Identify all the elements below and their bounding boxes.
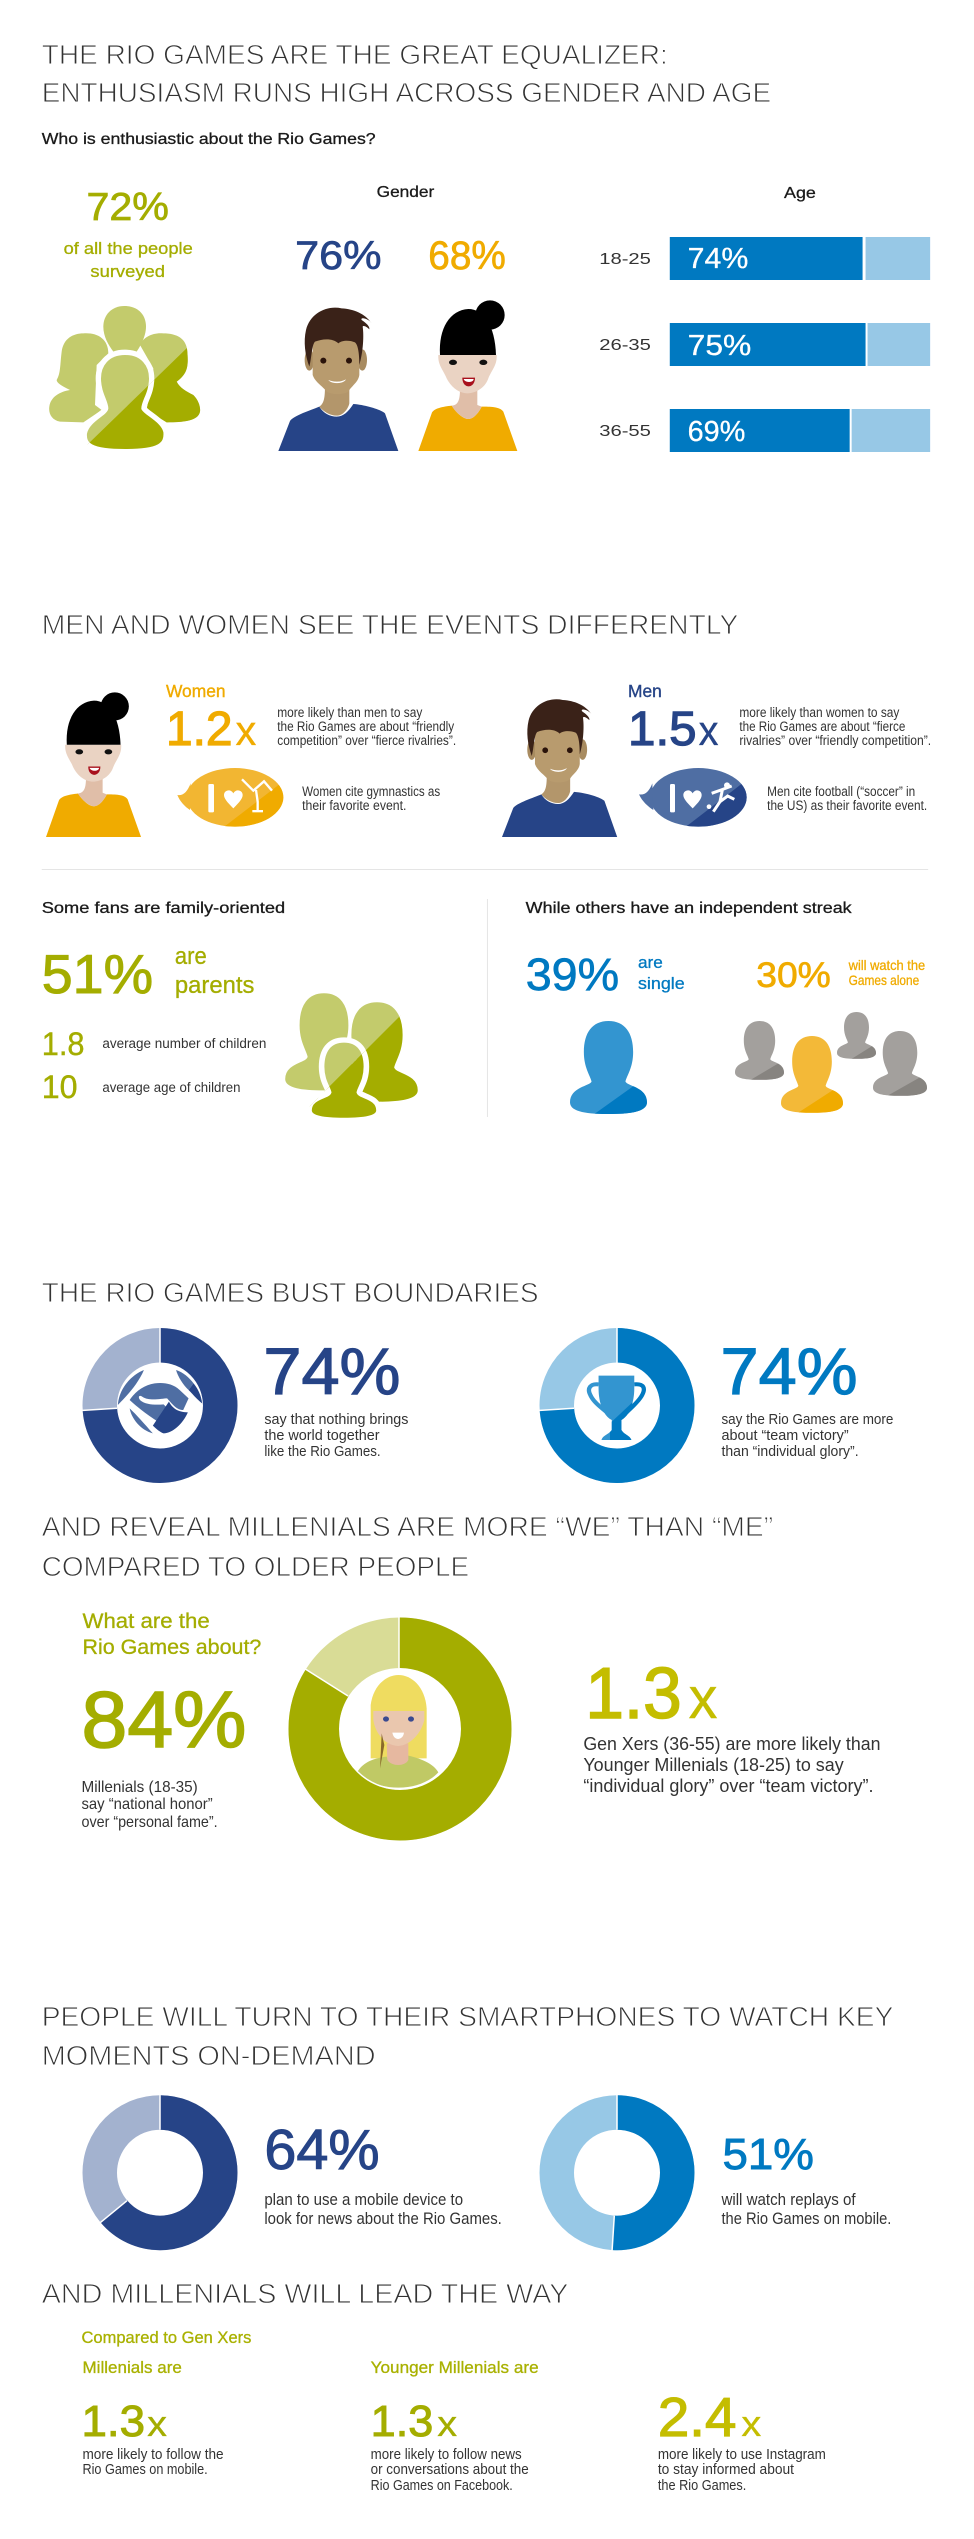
stat: 10 age [42, 1069, 240, 1105]
heading: age: Age [784, 185, 816, 202]
text: follow on mobile [82, 2447, 224, 2478]
text: men more likely: the Rio Games are about “fierce [739, 719, 905, 734]
stat: 10 age: average age of children [102, 1080, 240, 1095]
title: smartphones: MOMENTS ON-DEMAND [42, 2040, 376, 2071]
text: use instagram: more likely to use Instagram [658, 2447, 826, 2463]
stat: 1.3x gen xers: 1.3 [585, 1654, 682, 1734]
stat: 1.8 children: average number of children [102, 1036, 266, 1051]
text: team victory: say the Rio Games are more [721, 1411, 893, 1428]
bar: 26-35: 75% [688, 330, 751, 362]
panel: women [46, 681, 456, 837]
stat: 39 percent: 39% [526, 949, 619, 1000]
panel: gender [278, 184, 517, 451]
text: men cite football: Men cite football (“soccer” in [767, 784, 915, 799]
panel: mobile news [99, 2094, 502, 2233]
text: follow news on facebook: or conversations about the [371, 2462, 529, 2478]
icon: woman [418, 300, 517, 451]
stat: 64 percent: 64% [264, 2119, 380, 2182]
donut chart: 74 percent blue [538, 1327, 677, 1466]
column: millenials [81, 2358, 224, 2478]
icon: man [278, 308, 398, 451]
text: will watch replays: will watch replays of [721, 2191, 856, 2209]
panel: nothing brings the world together [81, 1327, 408, 1466]
stat: 30 percent: 30% [756, 956, 831, 995]
title: men and women: MEN AND WOMEN SEE THE EVENTS DIFFERENTLY [42, 609, 738, 640]
title: great equalizer: ENTHUSIASM RUNS HIGH ACROSS GENDER AND AGE [42, 77, 771, 108]
bar: 36-55: 69% [688, 416, 745, 448]
heading: family oriented: Some fans are family-oriented [42, 900, 285, 917]
caption: of all the people surveyed [64, 239, 193, 281]
caption: of all the people surveyed: of all the people [64, 239, 193, 258]
label: are single: single [638, 974, 685, 993]
text: will watch replays [721, 2191, 891, 2228]
text: women cite gymnastics [302, 784, 440, 813]
stat: 2.4x instagram: 2.4 [658, 2386, 736, 2448]
stat: 10 age: 10 [42, 1069, 78, 1105]
panel: all people surveyed [49, 186, 200, 452]
text: men cite football: the US) as their favorite event. [767, 798, 927, 813]
text: men more likely [739, 705, 931, 748]
label: are parents [175, 943, 254, 999]
stat: 84 percent: 84% [81, 1675, 246, 1764]
stat: 1.2x: x [236, 707, 256, 754]
text: team victory [721, 1411, 893, 1460]
icon: single person [570, 1021, 647, 1114]
column: instagram [658, 2386, 826, 2494]
text: nothing brings world together: say that nothing brings [264, 1411, 408, 1428]
title: we than me: COMPARED TO OLDER PEOPLE [42, 1551, 469, 1582]
icon: speech bubble I love gymnastics [177, 768, 283, 827]
stat: 51 percent: 51% [722, 2130, 814, 2179]
title: great equalizer: THE RIO GAMES ARE THE GREAT EQUALIZER: [42, 39, 668, 70]
text: team victory: about “team victory” [721, 1427, 849, 1444]
stat: 1.3x mobile: 1.3 [81, 2397, 145, 2446]
label: are single: are [638, 953, 663, 972]
text: use instagram: the Rio Games. [658, 2478, 746, 2494]
stat: 51 percent: 51% [42, 943, 153, 1005]
bar: 18-25: 18-25 [599, 251, 651, 268]
text: follow news on facebook: Rio Games on Facebook. [371, 2478, 513, 2494]
title: great equalizer [42, 39, 771, 108]
stat: 1.2x: 1.2 [166, 703, 233, 756]
stat: women 68 percent: 68% [428, 234, 506, 278]
text: millenials say national honor [81, 1779, 218, 1831]
title: we than me [42, 1511, 773, 1582]
text: women more likely: competition” over “fierce rivalries”. [277, 733, 456, 748]
caption: of all the people surveyed: surveyed [90, 262, 165, 281]
panel: family-oriented fans [42, 900, 419, 1120]
icon: handshake [118, 1370, 202, 1433]
text: team victory: than “individual glory”. [721, 1443, 859, 1460]
subheading: compared to gen xers: Compared to Gen Xers [81, 2328, 251, 2347]
text: follow news on facebook: more likely to follow news [371, 2447, 522, 2463]
icon: speech bubble I love football [639, 768, 747, 827]
stat: 1.3x facebook: x [437, 2404, 457, 2444]
text: women cite gymnastics: their favorite event. [302, 798, 406, 813]
stat: 2.4x instagram: x [741, 2404, 761, 2444]
label: millenials are: Millenials are [82, 2358, 182, 2377]
bar: 26-35 [599, 323, 930, 366]
text: women more likely: more likely than men to say [277, 705, 423, 720]
text: men more likely: more likely than women to say [739, 705, 900, 720]
heading: independent streak: While others have an independent streak [526, 900, 852, 917]
panel: age bar chart [599, 185, 930, 452]
label: younger millenials are: Younger Millenials are [371, 2358, 539, 2377]
text: plan to use a mobile device [264, 2191, 502, 2228]
bar: 26-35: 26-35 [599, 337, 651, 354]
question: What are the [82, 1610, 210, 1633]
title: smartphones [42, 2001, 893, 2071]
text: plan to use a mobile device: plan to use a mobile device to [264, 2191, 463, 2209]
icon: trophy [589, 1376, 644, 1440]
donut chart: 84 percent [304, 1616, 486, 1815]
text: use instagram [658, 2447, 826, 2494]
stat: 74 percent: 74% [263, 1334, 400, 1408]
question [82, 1610, 261, 1659]
subheading: who is enthusiastic: Who is enthusiastic about the Rio Games? [42, 131, 376, 148]
text: nothing brings world together: like the Rio Games. [264, 1443, 381, 1460]
title: smartphones: PEOPLE WILL TURN TO THEIR SMARTPHONES TO WATCH KEY [42, 2001, 893, 2032]
text: gen xers more likely: Gen Xers (36-55) are more likely than [583, 1733, 880, 1754]
text: millenials say national honor: over “personal fame”. [81, 1814, 218, 1831]
label: will watch alone [848, 957, 925, 988]
stat: 72 percent: 72% [86, 186, 169, 229]
label: are parents: parents [175, 972, 254, 999]
stat: 1.3x facebook: 1.3 [371, 2397, 433, 2446]
text: will watch replays: the Rio Games on mobile. [721, 2210, 891, 2228]
panel: team victory [538, 1327, 893, 1466]
text: millenials say national honor: say “national honor” [81, 1796, 213, 1813]
label: men: Men [628, 681, 662, 701]
icon: crowd of people [49, 306, 200, 452]
bar: 18-25: 74% [688, 243, 748, 275]
donut chart: 51 percent [557, 2094, 677, 2252]
text: plan to use a mobile device: look for news about the Rio Games. [264, 2210, 502, 2228]
label: are single [638, 953, 685, 993]
stat: 1.3x gen xers: x [689, 1667, 718, 1731]
text: nothing brings world together [264, 1411, 408, 1460]
label: women: Women [166, 681, 226, 701]
text: gen xers more likely [583, 1733, 880, 1796]
text: men cite football [767, 784, 927, 813]
stat: 1.8 children: 1.8 [42, 1026, 84, 1062]
icon: man portrait [502, 699, 617, 837]
label: will watch alone: will watch the [848, 957, 925, 973]
icon: young woman [357, 1675, 438, 1788]
text: women cite gymnastics: Women cite gymnastics as [302, 784, 440, 799]
bar: 36-55: 36-55 [599, 423, 651, 440]
panel: what are the rio games about [81, 1610, 880, 1831]
icon: family [284, 992, 419, 1120]
label: will watch alone: Games alone [849, 972, 919, 988]
text: gen xers more likely: Younger Millenials (18-25) to say [583, 1754, 844, 1775]
column: younger millenials facebook [371, 2358, 539, 2494]
donut chart: 74 percent navy [81, 1327, 220, 1466]
text: millenials say national honor: Millenials (18-35) [81, 1779, 198, 1796]
text: follow on mobile: more likely to follow the [82, 2447, 224, 2463]
text: women more likely [277, 705, 456, 748]
panel: independent fans [526, 900, 927, 1114]
stat: 1.3x mobile: x [147, 2404, 167, 2444]
stat: 1.8 children [42, 1026, 266, 1062]
stat: 1.5x: 1.5 [628, 703, 697, 756]
donut chart: 64 percent [99, 2094, 220, 2233]
stat: men 76 percent: 76% [295, 234, 382, 278]
stat: 74 percent: 74% [720, 1334, 858, 1408]
stat: 1.5x: x [699, 707, 719, 754]
text: men more likely: rivalries” over “friendly competition”. [739, 733, 931, 748]
text: gen xers more likely: “individual glory” over “team victory”. [583, 1775, 874, 1796]
heading: gender: Gender [377, 184, 435, 201]
bar: 18-25 [599, 237, 930, 280]
title: millenials lead the way: AND MILLENIALS WILL LEAD THE WAY [42, 2278, 568, 2309]
title: we than me: AND REVEAL MILLENIALS ARE MORE “WE” THAN “ME” [42, 1511, 773, 1542]
panel: mobile replays [557, 2094, 891, 2252]
text: nothing brings world together: the world together [264, 1427, 380, 1444]
title: rio games bust boundaries: THE RIO GAMES BUST BOUNDARIES [42, 1277, 539, 1308]
question: Rio Games about? [82, 1636, 261, 1659]
text: follow news on facebook [371, 2447, 529, 2494]
text: follow on mobile: Rio Games on mobile. [82, 2462, 208, 2478]
panel: men [502, 681, 931, 837]
bar: 36-55 [599, 409, 930, 452]
text: women more likely: the Rio Games are about “friendly [277, 719, 454, 734]
icon: woman portrait [46, 692, 141, 837]
text: use instagram: to stay informed about [658, 2462, 794, 2478]
icon: group with one highlighted person [735, 1012, 927, 1113]
label: are parents: are [175, 943, 207, 970]
